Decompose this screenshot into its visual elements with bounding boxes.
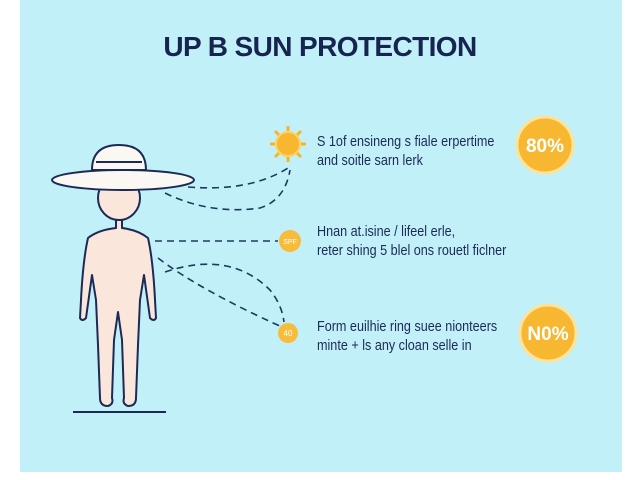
text block 3: Form euilhie ring suee nionteers — [317, 319, 497, 335]
badge: top percent — [517, 117, 573, 173]
text block 1: S 1of ensineng s fiale erpertime — [317, 134, 494, 150]
icon: small badge 1 — [279, 230, 301, 252]
ground line — [73, 411, 166, 413]
text block 2 — [317, 224, 506, 259]
icon: small badge 1: SPF — [283, 239, 297, 246]
dashed connectors — [155, 168, 290, 327]
text block 2: Hnan at.isine / lifeel erle, — [317, 224, 455, 240]
text block 3 — [317, 319, 497, 354]
badge: bottom percent — [520, 305, 576, 361]
badge: top percent: 80% — [526, 136, 564, 157]
figure: person with hat — [52, 145, 194, 406]
text block 2: reter shing 5 blel ons rouetl ficlner — [317, 243, 506, 259]
title: UP B SUN PROTECTION — [163, 31, 477, 62]
badge: bottom percent: N0% — [527, 324, 569, 345]
text block 1: and soitle sarn lerk — [317, 153, 423, 169]
icon: small badge 2: 40 — [284, 329, 293, 338]
icon: small badge 2 — [278, 323, 298, 343]
text block 3: minte + ls any cloan selle in — [317, 338, 472, 354]
icon: sun — [270, 126, 306, 162]
text block 1 — [317, 134, 494, 169]
